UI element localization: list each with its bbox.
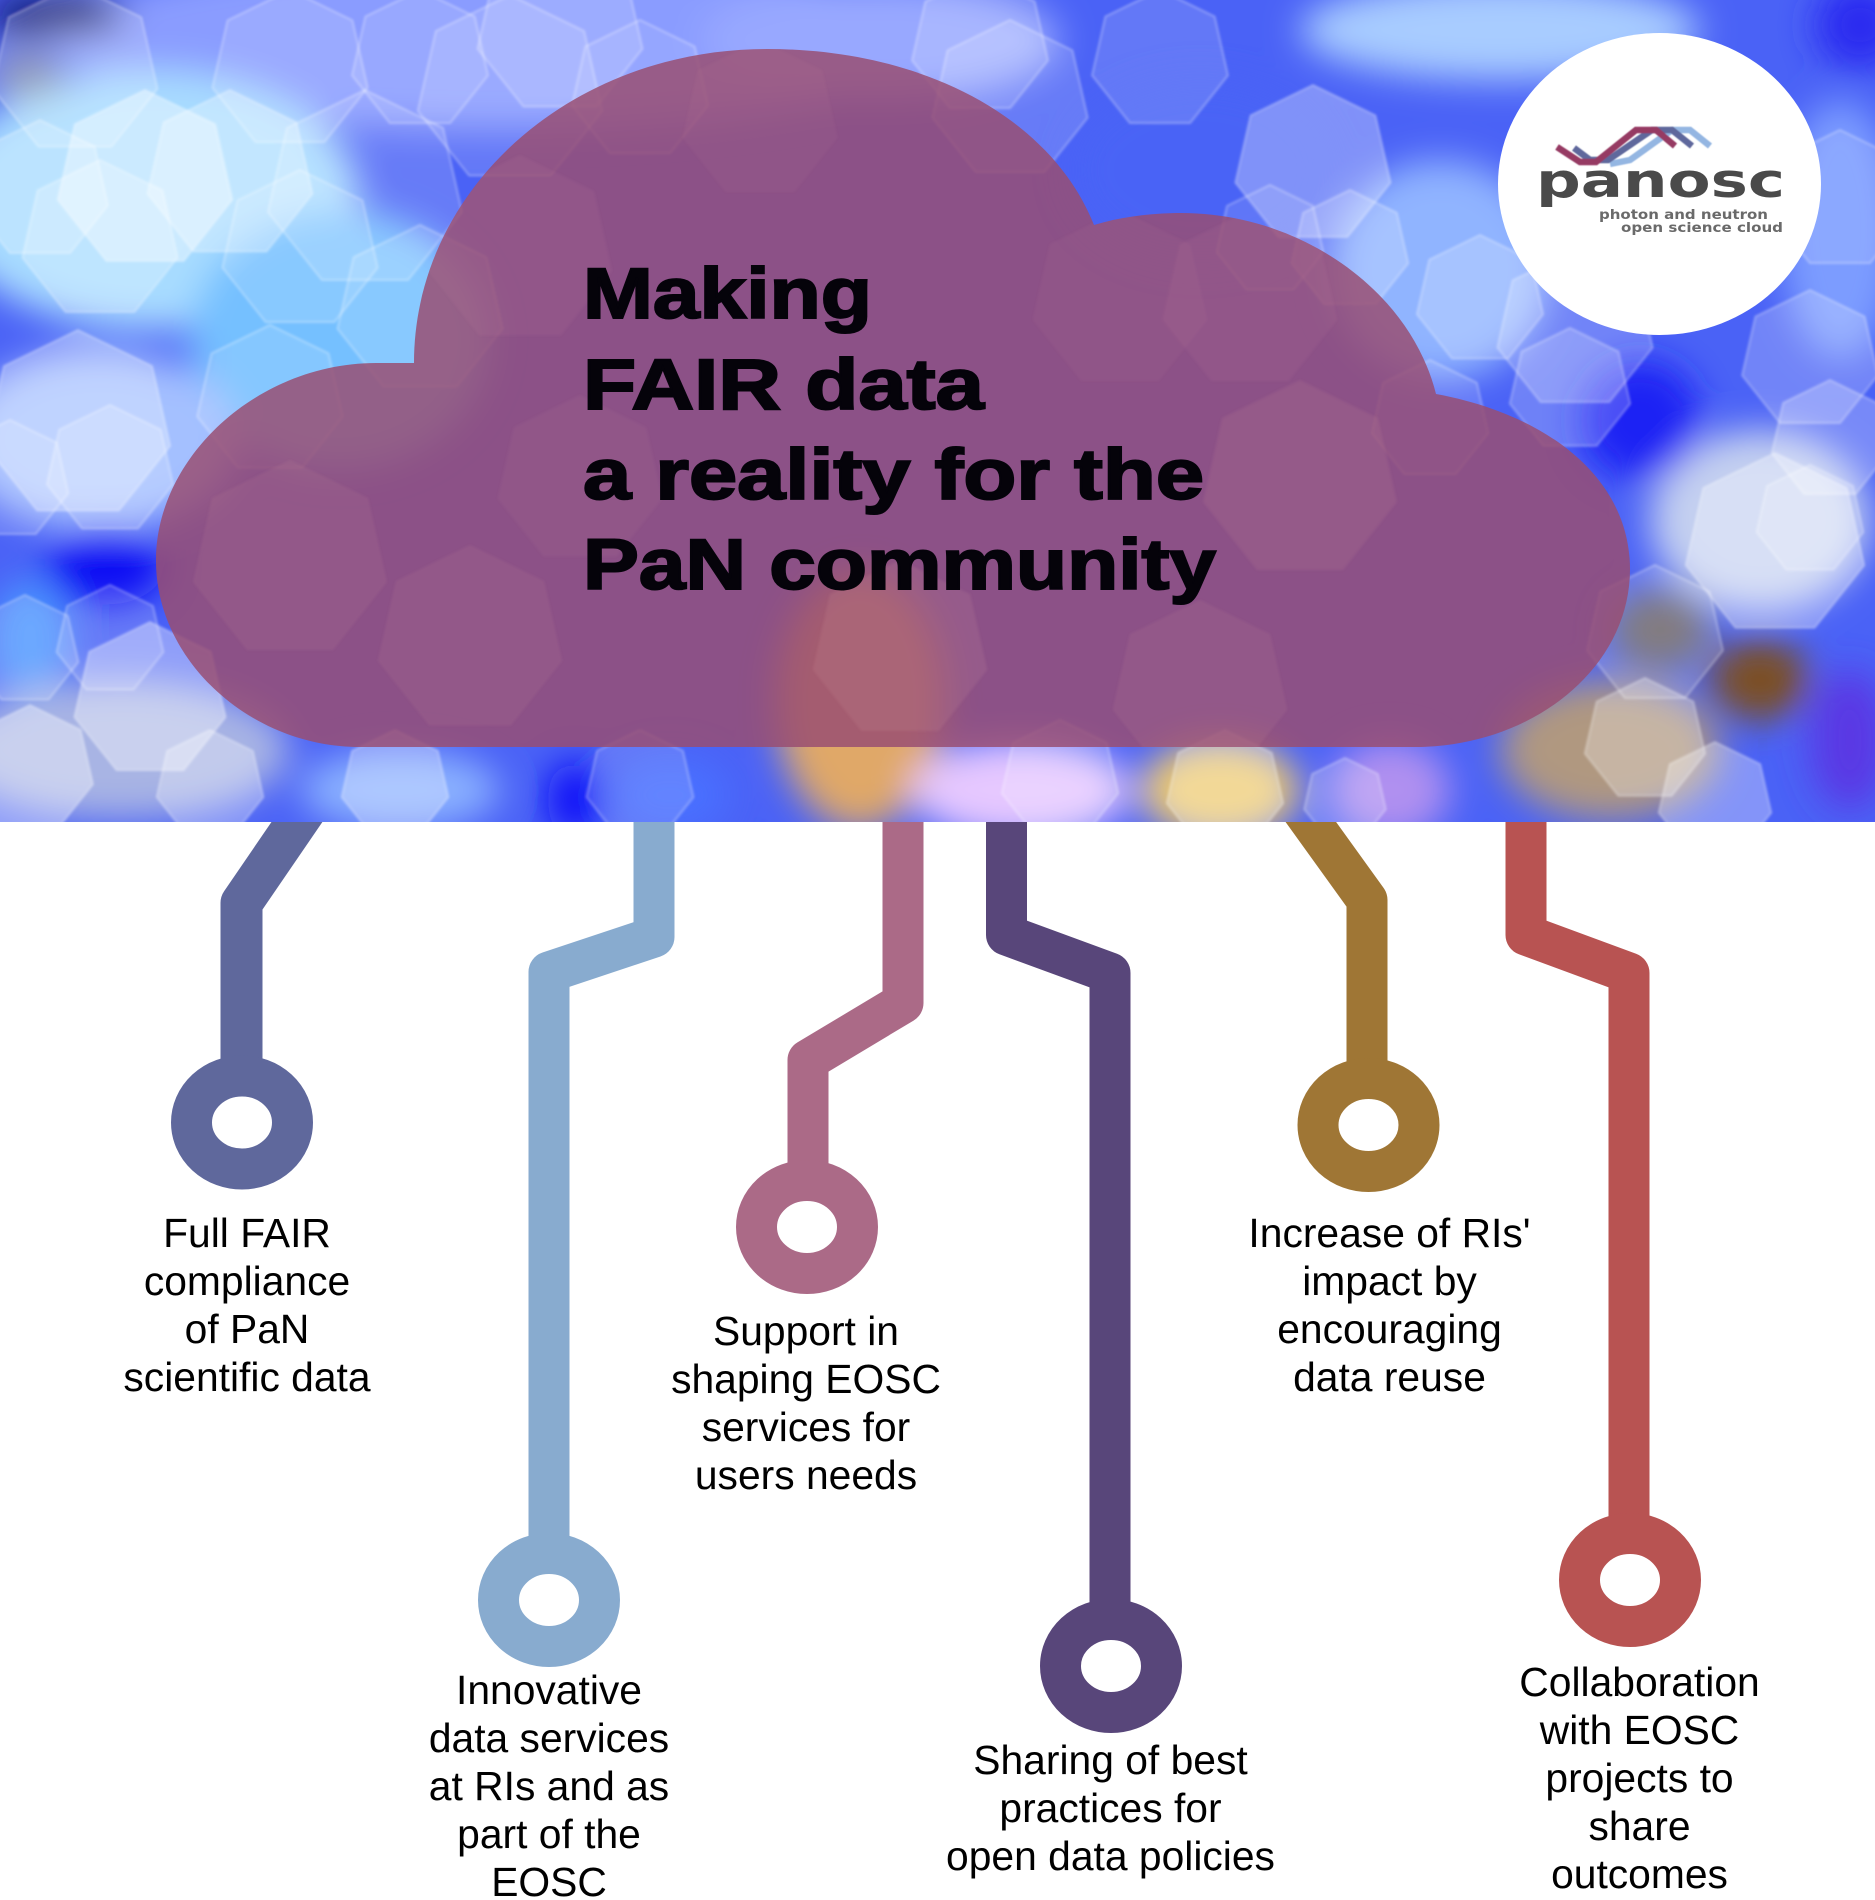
label: Collaboration with EOSC bbox=[1519, 1659, 1760, 1897]
logo: PaNOSC white circle bbox=[1498, 33, 1821, 335]
cloud bbox=[156, 40, 1630, 771]
label: Collaboration with EOSC: outcomes bbox=[1551, 1851, 1728, 1897]
label: Innovative data services: part of the bbox=[457, 1811, 641, 1857]
label: Collaboration with EOSC: share bbox=[1588, 1803, 1691, 1849]
banner: blue bokeh background bbox=[0, 0, 1875, 852]
label: Innovative data services bbox=[429, 1667, 669, 1900]
title: a reality for the bbox=[583, 436, 1204, 515]
label: Sharing of best practices: Sharing of best bbox=[973, 1737, 1248, 1783]
logo tagline: photon and neutron bbox=[1599, 208, 1768, 223]
label: Collaboration with EOSC: projects to bbox=[1545, 1755, 1734, 1801]
label: Collaboration with EOSC: with EOSC bbox=[1539, 1707, 1739, 1753]
connector: blue-grey pipe to Full FAIR compliance bbox=[192, 800, 312, 1169]
label: Support in shaping EOSC bbox=[671, 1308, 941, 1498]
connector: ochre pipe to Increase of RIs impact bbox=[1295, 800, 1419, 1172]
label: Increase of RIs impact: encouraging bbox=[1277, 1306, 1502, 1352]
title: PaN community bbox=[583, 526, 1217, 605]
label: Innovative data services: data services bbox=[429, 1715, 669, 1761]
logo wordmark: panosc bbox=[1536, 154, 1785, 209]
connector: light blue pipe to Innovative data services bbox=[498, 800, 654, 1646]
label: Increase of RIs impact: data reuse bbox=[1293, 1354, 1486, 1400]
title: FAIR data bbox=[583, 346, 985, 425]
connector: red pipe to Collaboration with EOSC bbox=[1526, 800, 1680, 1626]
label: Support in shaping EOSC: Support in bbox=[713, 1308, 899, 1354]
label: Support in shaping EOSC: users needs bbox=[695, 1452, 917, 1498]
label: Increase of RIs impact: Increase of RIs' bbox=[1248, 1210, 1531, 1256]
label: Support in shaping EOSC: services for bbox=[702, 1404, 910, 1450]
label: Full FAIR compliance: scientific data bbox=[123, 1354, 371, 1400]
connector: dark purple pipe to Sharing of best practices bbox=[1006, 800, 1162, 1712]
label: Collaboration with EOSC: Collaboration bbox=[1519, 1659, 1760, 1705]
logo tagline: open science cloud bbox=[1621, 221, 1783, 236]
label: Full FAIR compliance: of PaN bbox=[185, 1306, 309, 1352]
label: Increase of RIs impact: impact by bbox=[1302, 1258, 1477, 1304]
icon: helix wave bbox=[1557, 130, 1710, 164]
label: Sharing of best practices: practices for bbox=[999, 1785, 1222, 1831]
label: Innovative data services: Innovative bbox=[456, 1667, 642, 1713]
logo tagline bbox=[1599, 208, 1783, 236]
connector: rose pipe to Support in shaping EOSC bbox=[756, 800, 903, 1274]
label: Full FAIR compliance bbox=[123, 1210, 371, 1400]
label: Support in shaping EOSC: shaping EOSC bbox=[671, 1356, 941, 1402]
label: Sharing of best practices bbox=[946, 1737, 1275, 1879]
label: Sharing of best practices: open data policies bbox=[946, 1833, 1275, 1879]
label: Full FAIR compliance: compliance bbox=[144, 1258, 350, 1304]
title bbox=[583, 255, 1217, 605]
title: Making bbox=[583, 255, 872, 334]
label: Increase of RIs impact bbox=[1248, 1210, 1531, 1400]
label: Innovative data services: at RIs and as bbox=[429, 1763, 669, 1809]
label: Full FAIR compliance: Full FAIR bbox=[163, 1210, 331, 1256]
